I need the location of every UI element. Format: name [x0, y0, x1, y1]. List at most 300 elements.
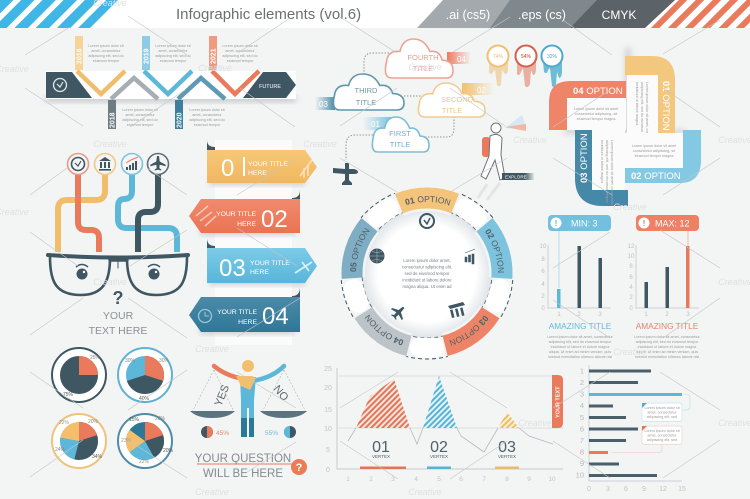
segment 05	[352, 225, 370, 278]
cloud second: TITLE	[442, 106, 462, 115]
balance figure	[190, 360, 307, 480]
vertex 03: VERTEX	[498, 454, 516, 459]
hatched peak orange	[356, 379, 410, 428]
min axis labels: 8	[541, 257, 545, 263]
x axis labels: 1	[346, 476, 350, 483]
max axis labels: 1	[644, 312, 648, 318]
pie 1	[52, 348, 106, 402]
row labels: 1	[580, 366, 584, 376]
x axis labels: 10	[548, 476, 556, 483]
ring center text: incididunt ut labore dolore	[402, 278, 452, 282]
blue header stripes	[0, 0, 118, 28]
ring center text: magna aliqua. Ut enim ad	[403, 284, 452, 289]
x axis labels: 4	[414, 476, 418, 483]
no percent: 55%	[265, 430, 278, 437]
row labels	[576, 366, 584, 480]
pie 3: 20%	[88, 419, 99, 425]
format tab: CMYK: CMYK	[602, 8, 636, 22]
white connectors	[352, 198, 502, 348]
tab 04: 04	[457, 55, 466, 64]
timeline text 2016	[88, 44, 124, 63]
max tab	[636, 215, 699, 231]
light blue band	[623, 130, 701, 183]
vertex 02: VERTEX	[430, 454, 448, 459]
question line	[197, 464, 293, 465]
icon: clock	[420, 214, 434, 228]
panel teal: Lorem ipsum dolor sit amet, consectetur	[610, 140, 614, 206]
line trough	[348, 428, 553, 452]
chevron orange	[212, 71, 259, 94]
tube orange	[78, 175, 99, 252]
ribbon 03: HERE	[250, 269, 269, 276]
max axis labels: 2	[629, 295, 633, 301]
chevron grey	[111, 78, 158, 99]
ribbon 04	[189, 287, 300, 334]
question text: WILL BE HERE	[203, 468, 283, 480]
ribbon list	[189, 140, 317, 345]
blue connector	[682, 394, 690, 410]
vertex line chart	[324, 366, 563, 483]
label 03 option: 03 OPTION	[579, 133, 590, 183]
ribbon 02: HERE	[237, 221, 256, 228]
figure arms	[214, 366, 244, 379]
max axis labels: 6	[629, 275, 633, 281]
row labels: 2	[580, 378, 584, 387]
pie 1: 25%	[90, 355, 101, 361]
pie 3	[52, 414, 106, 468]
timeline text 2021: Lorem ipsum dolor sit	[222, 44, 258, 48]
tube blue	[118, 175, 177, 252]
x axis labels: 2	[369, 476, 373, 483]
panel shadows	[565, 48, 686, 190]
figure lower	[241, 418, 254, 437]
ribbon 03: 03	[219, 255, 246, 282]
panel orange	[567, 98, 626, 130]
orange callout	[642, 426, 682, 444]
watermark marks: Creative	[518, 418, 552, 428]
dotted connectors	[346, 53, 454, 160]
hiker figure	[481, 134, 505, 180]
glasses caption: YOUR	[103, 310, 134, 322]
pie 4: 23%	[121, 438, 132, 444]
glasses diagram	[48, 154, 188, 337]
x axis labels	[346, 476, 556, 483]
blue callout: Lorem ipsum dolor sit	[644, 406, 680, 410]
max pointer	[687, 231, 689, 246]
min axis labels: 3	[598, 312, 602, 318]
orange bar	[589, 451, 608, 454]
teal band	[575, 130, 628, 206]
pie 4: 15%	[129, 417, 140, 423]
timeline text 2018	[122, 108, 158, 127]
watermark marks: Creative	[408, 62, 442, 72]
year tab 2021: 2021	[210, 48, 218, 64]
chevron blue	[144, 71, 192, 94]
year tab 2019	[142, 36, 150, 70]
min axis labels: 1	[557, 312, 561, 318]
cloud first: TITLE	[390, 140, 410, 149]
timeline text 2021	[222, 44, 258, 63]
bar chart: min	[540, 215, 614, 359]
tab 02	[462, 83, 494, 95]
max paragraph: Lorem ipsum dolor sit amet, consectetur	[634, 335, 701, 339]
ring segment masks	[352, 198, 502, 346]
tab 02: 02	[477, 86, 486, 95]
x axis labels: 5	[437, 476, 441, 483]
your text tab: YOUR TEXT	[556, 386, 562, 418]
ring labels: 05 OPTION	[350, 228, 370, 272]
white strip	[215, 140, 292, 345]
x axis labels: 6	[459, 476, 463, 483]
x axis labels: 3	[606, 486, 610, 493]
segment 03	[445, 313, 491, 346]
x axis labels: 0	[587, 486, 591, 493]
right eye	[148, 264, 160, 280]
panel teal: adipiscing elit, sed do eiusmod tempor	[605, 140, 609, 203]
min title: AMAZING TITLE	[549, 321, 612, 331]
timeline right cap future	[243, 72, 296, 98]
cloud first: FIRST	[389, 129, 411, 138]
pie 4: 20%	[155, 416, 166, 422]
x axis labels: 15	[678, 486, 686, 493]
watermark marks: Creative	[198, 63, 232, 73]
tab 01	[363, 117, 395, 130]
x axis labels	[587, 486, 686, 493]
bar chart: max	[628, 215, 701, 359]
max axis labels: 3	[686, 312, 690, 318]
max paragraph	[634, 335, 701, 359]
panel yellow: Lorem ipsum dolor sit amet, consectetur	[645, 82, 649, 148]
year tab 2018	[108, 100, 116, 129]
ring center text	[402, 258, 452, 289]
pie 3: 34%	[92, 454, 103, 460]
timeline text 2018: amet, consectetur	[125, 113, 155, 117]
min paragraph: aliqua. Ut enim ad minim veniam, quis	[549, 350, 611, 354]
glasses frame	[48, 255, 188, 295]
year tab 2021	[209, 36, 218, 70]
timeline text 2016: adipiscing elit, sed do	[88, 54, 124, 58]
min axis labels: 0	[541, 306, 545, 312]
y axis labels	[324, 366, 332, 474]
segment 01	[399, 198, 455, 204]
x axis labels: 8	[505, 476, 509, 483]
watermark marks: Creative	[613, 202, 647, 212]
min paragraph: nostrud exercitation ullamco laboris nisi	[548, 355, 612, 359]
panel yellow	[627, 75, 658, 148]
min paragraph: adipiscing elit, sed do eiusmod tempor	[549, 340, 612, 344]
ring center text: sed do eiusmod tempor	[405, 271, 450, 276]
max axis labels	[628, 244, 690, 318]
backpack	[482, 137, 490, 157]
min paragraph	[547, 335, 614, 359]
tab 04	[447, 52, 471, 64]
explore shadow	[478, 183, 500, 200]
timeline text 2019: eiusmod tempor	[160, 59, 187, 63]
timeline text 2021: amet, consectetur	[225, 49, 255, 53]
max axis labels: 12	[628, 244, 635, 250]
min axis labels: 2	[541, 294, 545, 300]
pie 4: 20%	[163, 448, 174, 454]
panel teal: incididunt ut labore magna	[600, 140, 604, 184]
ribbon 02	[189, 190, 300, 235]
timeline text 2019: amet, consectetur	[158, 49, 188, 53]
row labels: 3	[580, 390, 584, 398]
y axis labels: 5	[326, 447, 330, 454]
y axis labels: 10	[324, 426, 332, 433]
row labels: 10	[576, 470, 584, 480]
drip blue: 32%	[547, 54, 558, 60]
format tab: eps: .eps (cs)	[518, 8, 566, 22]
ribbon 04: 04	[262, 303, 289, 330]
ring center text: Lorem ipsum dolor amet,	[403, 258, 451, 263]
blue callout: adipiscing elit, sed	[647, 415, 677, 419]
light rays	[505, 115, 526, 129]
ribbon 03: YOUR TITLE	[250, 260, 290, 267]
min axis labels: 10	[540, 244, 547, 250]
your text tab	[552, 375, 563, 428]
icon: growth chart	[122, 154, 142, 174]
format tab: ai	[417, 0, 530, 28]
ring labels: 04 OPTION	[364, 314, 404, 346]
watermark marks: Creative	[513, 135, 547, 145]
pie 2	[118, 348, 172, 402]
cloud fourth: FOURTH	[407, 53, 439, 62]
max tab: !	[643, 219, 645, 228]
question badge: ?	[296, 462, 303, 474]
ribbon 04: YOUR TITLE	[217, 309, 257, 316]
timeline text 2021: eiusmod tempor	[227, 59, 254, 63]
y axis labels: 20	[324, 385, 332, 392]
panel teal	[592, 130, 625, 206]
row labels: 9	[580, 459, 584, 468]
orange header stripes	[645, 0, 750, 28]
x axis labels: 6	[624, 486, 628, 493]
timeline text 2019	[155, 44, 191, 63]
x axis labels: 9	[527, 476, 531, 483]
pinwheel options	[549, 48, 701, 206]
min axis labels: 6	[541, 269, 545, 275]
pie charts	[52, 348, 174, 468]
tube yellow	[58, 175, 105, 252]
figure body	[240, 377, 256, 437]
year tab 2019: 2019	[144, 48, 150, 64]
segment 04	[363, 313, 409, 346]
vertex 01: 01	[372, 439, 390, 456]
icon: globe	[370, 248, 384, 264]
tab 01: 01	[371, 120, 380, 129]
max paragraph: aliqua. Ut enim ad minim veniam, quis	[636, 350, 698, 354]
max paragraph: adipiscing elit, sed do eiusmod tempor	[636, 340, 699, 344]
glasses caption	[89, 310, 147, 337]
year tab 2020: 2020	[176, 112, 184, 128]
bar dark 1	[578, 246, 581, 308]
pie 3: 24%	[55, 447, 66, 453]
year tab 2016	[75, 36, 84, 70]
ring labels	[350, 196, 504, 346]
label 04 option: 04 OPTION	[573, 86, 623, 97]
icon: bank	[448, 302, 465, 318]
cloud third: THIRD	[355, 86, 378, 95]
left eye	[76, 264, 88, 280]
figure head	[242, 360, 254, 372]
row labels: 6	[580, 424, 584, 434]
icon: growth chart	[465, 249, 475, 264]
range bar yellow	[495, 466, 519, 469]
option ring	[340, 188, 514, 360]
hatched peak yellow	[498, 412, 519, 428]
max axis labels: 10	[628, 254, 635, 260]
hiker	[478, 115, 534, 200]
icon: plane silhouette	[333, 163, 358, 185]
cloud third	[333, 74, 404, 110]
orange callout: adipiscing elit, sed	[647, 438, 677, 442]
row labels: 7	[580, 436, 584, 445]
panel blue: eiusmod tempor magna	[635, 154, 674, 158]
pie 1: 75%	[63, 392, 74, 398]
ring center text: consectetur adipiscing elit,	[402, 264, 452, 270]
watermark marks: Creative	[613, 347, 647, 357]
watermark marks: Creative	[303, 139, 337, 149]
bar blue	[557, 289, 560, 308]
pie 4: 22%	[139, 459, 150, 465]
ring labels: 03 OPTION	[450, 316, 488, 346]
timeline text 2019: Lorem ipsum dolor sit	[155, 44, 191, 48]
watermark marks: Creative	[195, 344, 229, 354]
format tab: ai: .ai (cs5)	[446, 8, 490, 22]
figure chest	[236, 376, 256, 390]
timeline text 2020: eiusmod tempor	[194, 123, 221, 127]
question text	[195, 453, 291, 480]
inner disc	[362, 208, 492, 338]
hatched peak blue	[423, 376, 457, 428]
timeline right cap future: FUTURE	[259, 84, 281, 90]
max title: AMAZING TITLE	[636, 321, 699, 331]
x axis labels: 3	[391, 476, 395, 483]
icon: plane	[148, 154, 168, 174]
ribbon 01: HERE	[248, 170, 267, 177]
cloud second: SECOND	[441, 95, 474, 104]
cloud second	[418, 83, 485, 117]
timeline text 2018: eiusmod tempor	[127, 123, 154, 127]
min tab: !	[555, 219, 557, 228]
max paragraph: incididunt ut labore et dolore magna	[638, 345, 697, 349]
right scale: NO	[271, 383, 291, 404]
drip yellow: 74%	[493, 54, 504, 60]
pie 2: 30%	[125, 358, 136, 364]
year tab 2018: 2018	[110, 112, 116, 128]
question text: YOUR QUESTION	[195, 453, 291, 465]
panel blue: Lorem ipsum dolor sit amet	[632, 144, 676, 148]
min axis labels: 2	[577, 312, 581, 318]
orange band	[549, 81, 626, 130]
yes percent: 45%	[216, 430, 229, 437]
timeline left cap with clock	[46, 72, 92, 98]
timeline text 2020: adipiscing elit, sed do	[189, 118, 225, 122]
bar dark 2	[598, 258, 602, 308]
panel blue	[625, 133, 683, 168]
label 01 option: 01 OPTION	[660, 81, 671, 131]
ribbon 04: HERE	[238, 319, 257, 326]
explore label: EXPLORE	[505, 174, 527, 180]
timeline text 2018: adipiscing elit, sed do	[122, 118, 158, 122]
title: Infographic elements (vol.6)	[176, 6, 361, 23]
blue callout	[642, 403, 682, 422]
blue callout: amet, consectetur	[647, 410, 677, 414]
min paragraph: incididunt ut labore et dolore magna	[551, 345, 610, 349]
vertex 03: 03	[498, 439, 516, 456]
timeline text 2019: adipiscing elit, sed do	[155, 54, 191, 58]
timeline text 2020: Lorem ipsum dolor sit	[189, 108, 225, 112]
min tab: MIN: 3	[571, 218, 598, 228]
timeline text 2016: eiusmod tempor	[93, 59, 120, 63]
ribbon 03	[207, 238, 317, 285]
header	[0, 0, 750, 28]
pie 4	[118, 414, 174, 468]
icon: plane	[388, 302, 409, 323]
y axis labels: 25	[324, 366, 332, 373]
drip red: 54%	[521, 54, 532, 60]
yellow band	[625, 56, 675, 133]
panel yellow: adipiscing elit, sed do eiusmod tempor	[640, 82, 644, 145]
left scale: YES	[213, 383, 232, 408]
min pointer	[558, 231, 560, 288]
timeline text 2020: amet, consectetur	[192, 113, 222, 117]
timeline text 2020	[189, 108, 225, 127]
vertex 01: VERTEX	[372, 454, 390, 459]
cloud fourth: TITLE	[413, 64, 433, 73]
panel orange: Lorem ipsum dolor sit amet	[574, 107, 618, 111]
ribbon 02: YOUR TITLE	[216, 211, 256, 218]
timeline	[46, 36, 296, 129]
dark bars	[589, 370, 657, 477]
ribbon 01	[207, 140, 317, 185]
max axis labels: 0	[629, 306, 633, 312]
panel blue: consectetur adipiscing, sit	[633, 149, 675, 153]
watermark marks: Creative	[93, 139, 127, 149]
ribbon 02: 02	[261, 206, 288, 233]
timeline text 2021: adipiscing elit, sed do	[222, 54, 258, 58]
percentage drips	[488, 46, 562, 87]
panel yellow: incididunt ut labore magna	[635, 82, 639, 126]
year tab 2020	[175, 100, 184, 129]
orange connector	[611, 444, 662, 452]
row labels: 8	[580, 448, 584, 456]
timeline text 2016: amet, consectetur	[91, 49, 121, 53]
watermark marks: Creative	[408, 487, 442, 497]
y axis labels: 15	[324, 407, 332, 414]
min axis labels: 4	[541, 282, 545, 288]
orange callout: amet, consectetur	[647, 434, 677, 438]
watermark marks: Creative	[195, 487, 229, 497]
icon: bank	[94, 154, 116, 174]
min axis labels	[540, 244, 602, 318]
label 02 option: 02 OPTION	[631, 171, 681, 182]
max paragraph: nostrud exercitation ullamco laboris nisi	[635, 355, 699, 359]
format tab: eps	[490, 0, 600, 28]
max axis labels: 4	[629, 285, 633, 291]
bar orange	[686, 246, 690, 308]
panel orange: eiusmod tempor magna	[577, 117, 616, 121]
clouds with titles	[315, 39, 494, 185]
chevron teal	[178, 78, 225, 99]
x axis labels: 7	[482, 476, 486, 483]
x axis labels: 12	[659, 486, 667, 493]
orange callout: Lorem ipsum dolor sit	[644, 429, 680, 433]
row labels: 5	[580, 413, 584, 422]
bar dark 1	[644, 282, 648, 308]
head	[491, 123, 501, 133]
glasses caption: TEXT HERE	[89, 325, 147, 337]
